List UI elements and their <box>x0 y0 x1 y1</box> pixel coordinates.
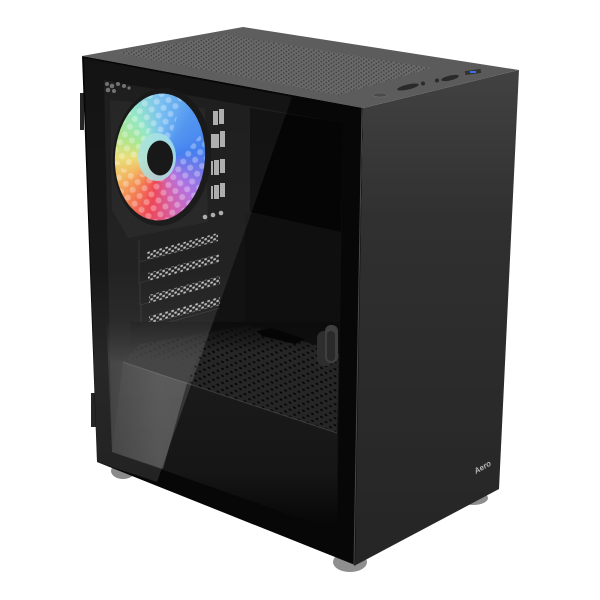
drive bays <box>245 212 341 360</box>
fan <box>114 94 206 220</box>
motherboard compartment shadow <box>250 108 343 232</box>
illustration: PC case <box>80 27 519 572</box>
foot: left <box>111 463 135 479</box>
lower interior reflection <box>108 358 187 469</box>
glass reflection <box>84 58 292 482</box>
shroud edge <box>123 362 337 433</box>
fan ring <box>108 85 216 229</box>
shroud left fade <box>106 318 215 383</box>
top mesh <box>116 35 432 95</box>
side panel <box>354 70 519 566</box>
front glass panel <box>82 56 363 565</box>
PCI slots <box>147 233 220 324</box>
PSU shroud top <box>123 325 339 433</box>
top vent holes <box>105 82 131 93</box>
rear IO slits <box>203 109 225 219</box>
edge highlight <box>354 108 362 565</box>
shroud top fade <box>130 322 340 352</box>
hinge: lower <box>91 393 96 427</box>
ports <box>373 69 481 97</box>
PSU cable hole <box>257 328 305 344</box>
honeycomb: lower <box>116 133 205 220</box>
thumbscrew latch <box>317 325 338 366</box>
logo: Aero <box>472 459 493 476</box>
tray bracket <box>110 100 208 238</box>
hinge: upper <box>80 93 84 130</box>
top panel <box>82 27 519 108</box>
interior <box>104 80 343 531</box>
PSU shroud front <box>112 362 337 531</box>
honeycomb: upper-left <box>115 94 182 165</box>
PCI bracket <box>139 240 220 330</box>
foot: right rear <box>458 491 488 505</box>
foot: front <box>333 552 367 572</box>
fan hub <box>138 133 176 181</box>
